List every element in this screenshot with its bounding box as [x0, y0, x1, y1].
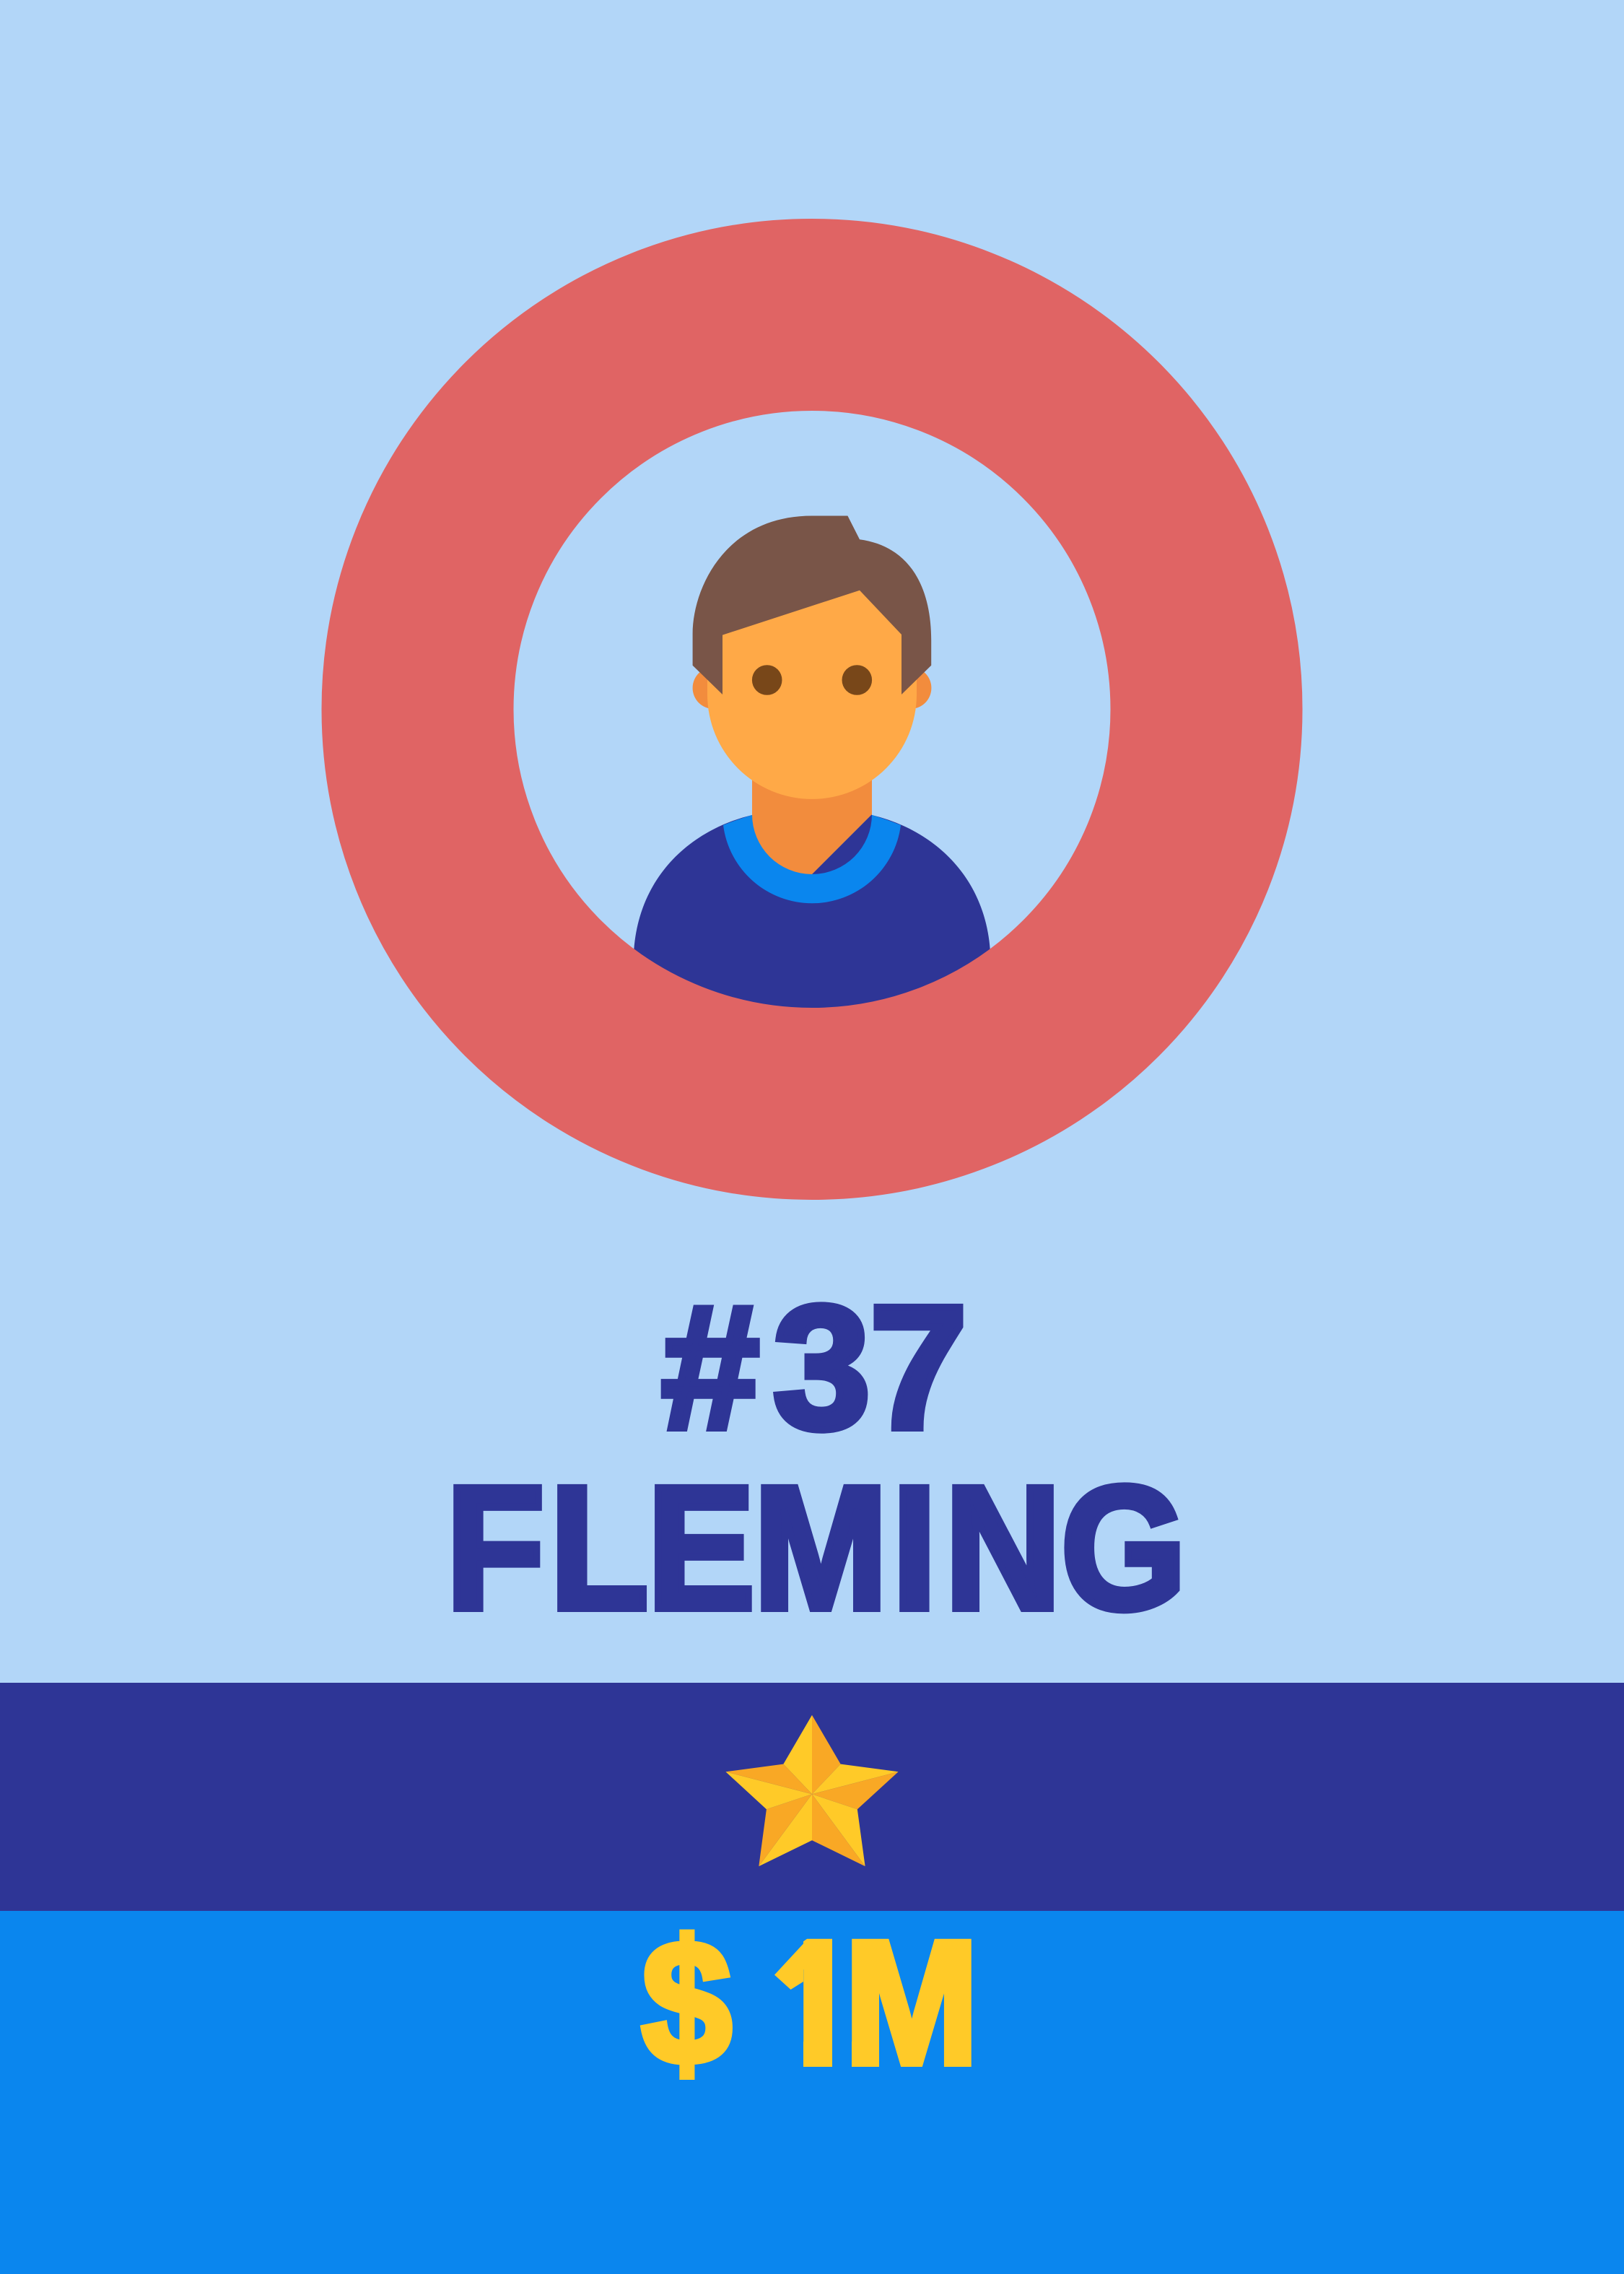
portrait avatar	[634, 515, 990, 1083]
salary value: $ 1M	[642, 1905, 979, 2101]
avatar neckline wedge	[812, 814, 872, 874]
icon: star	[725, 1715, 899, 1866]
avatar neck	[752, 758, 872, 874]
avatar face	[707, 585, 917, 799]
navy band	[0, 1683, 1624, 1911]
avatar hair	[693, 515, 931, 694]
avatar shirt	[634, 815, 990, 1083]
avatar collar	[723, 815, 901, 903]
donut ring	[417, 315, 1207, 1104]
player name: FLEMING	[446, 1450, 1187, 1646]
avatar ears	[693, 667, 931, 709]
rank number: #37	[661, 1270, 967, 1465]
avatar eyes	[752, 665, 872, 695]
background panel	[0, 0, 1624, 1683]
blue footer band	[0, 1911, 1624, 2274]
